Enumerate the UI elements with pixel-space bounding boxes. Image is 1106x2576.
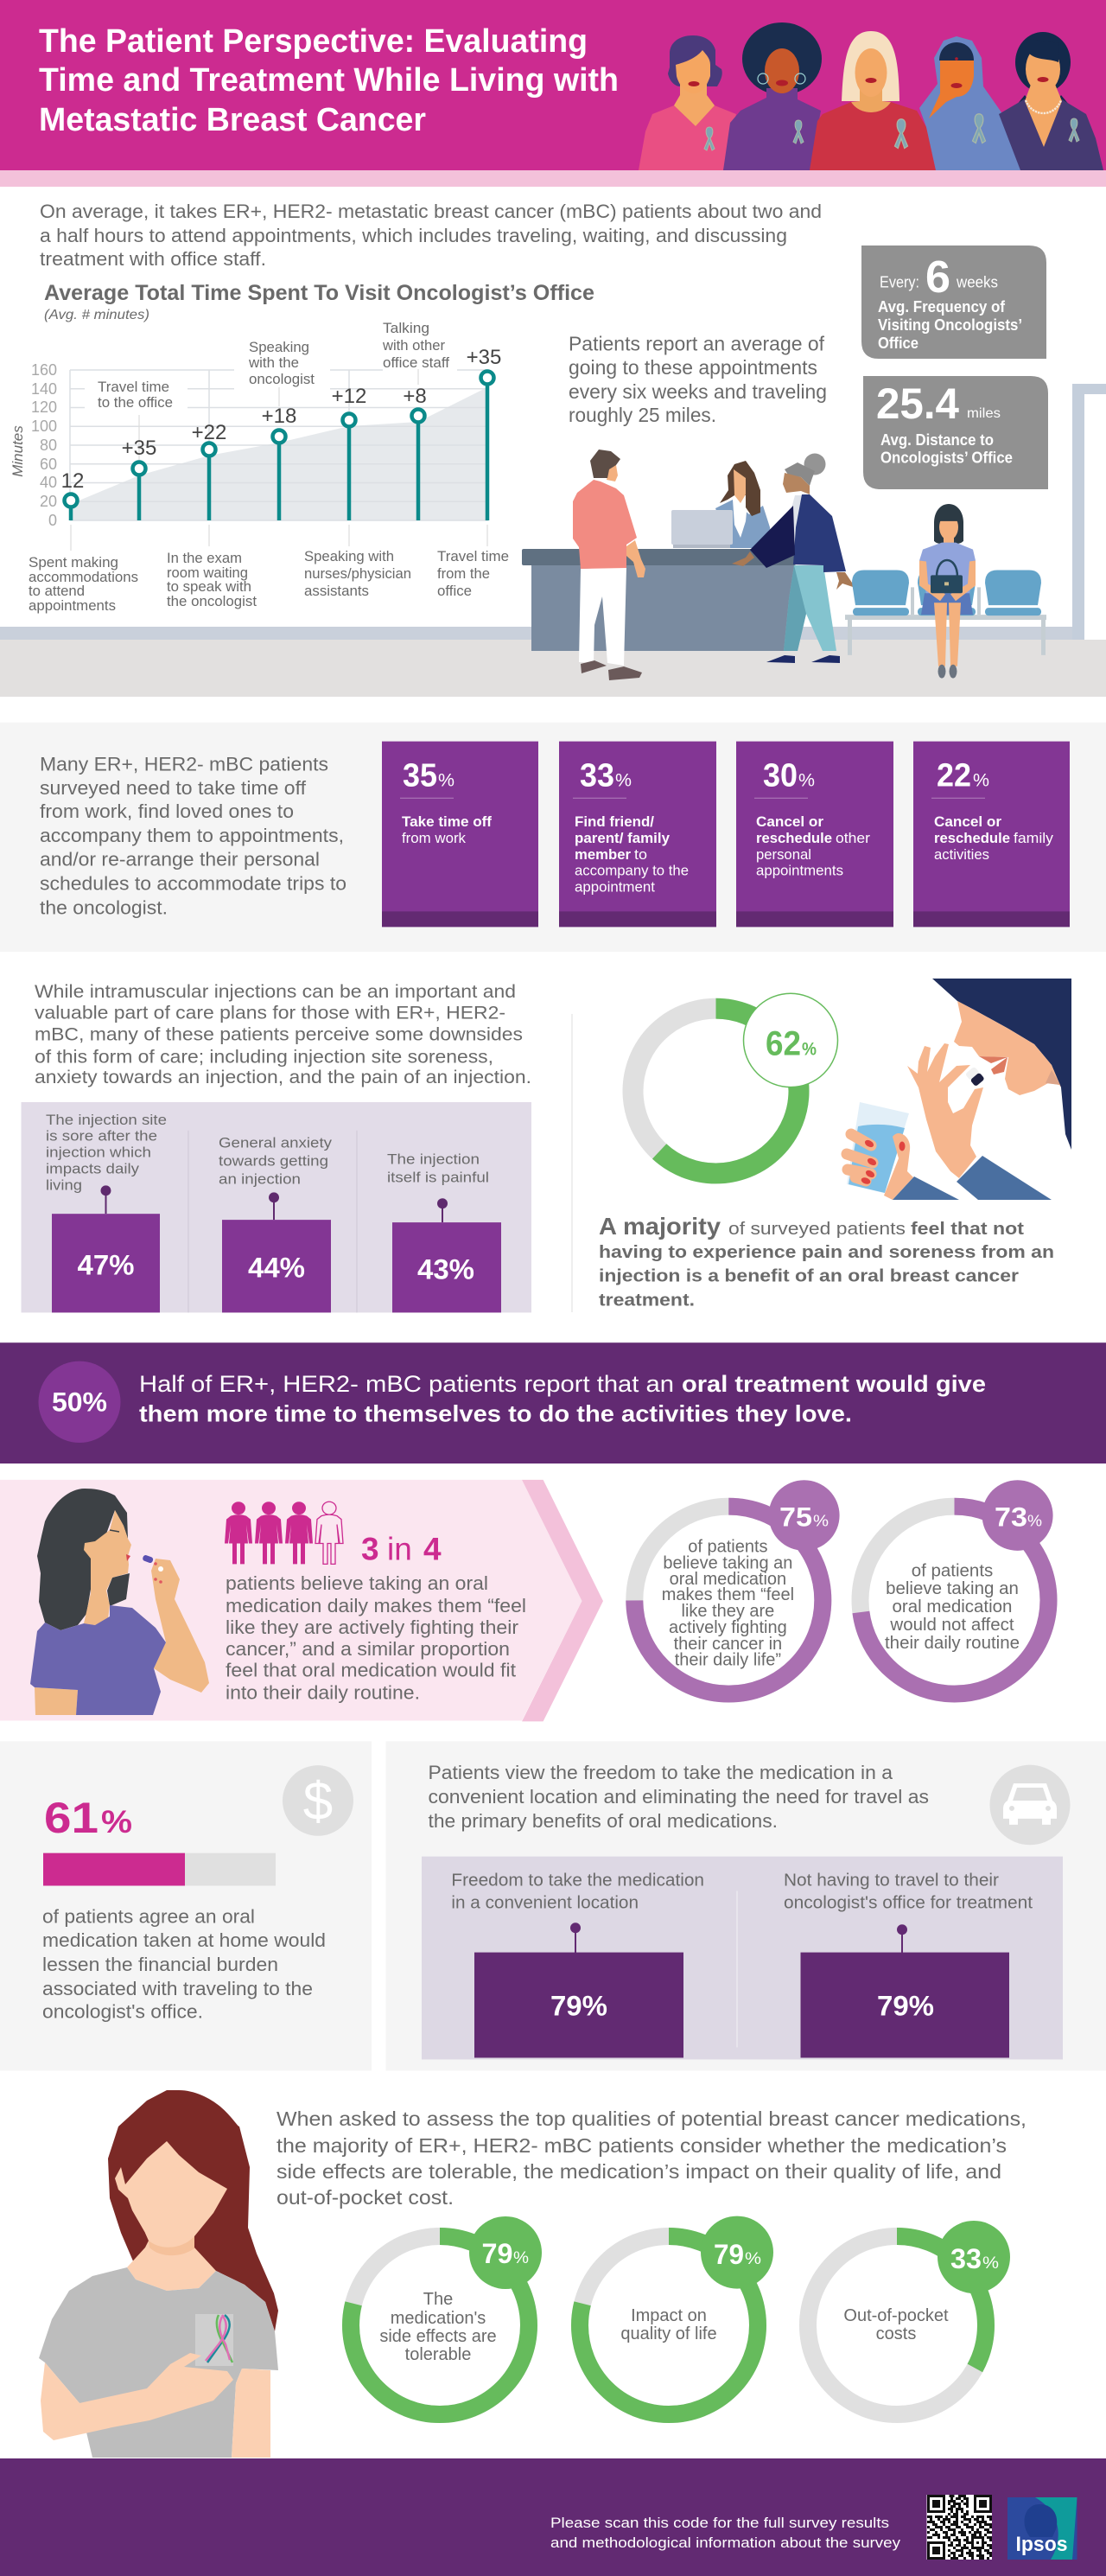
stat card: distance [863,376,1048,489]
text: top qualities: When asked to assess the top qualities of potential breast cancer medications, [276,2107,1027,2130]
title [39,23,619,138]
value labels: +8 [403,385,427,408]
bar: 47%: 47% [77,1249,135,1281]
panel: schedule impact [0,723,1106,952]
text: injections: valuable part of care plans for those with ER+, HER2- [35,1003,505,1023]
donut: side effects 79%: 79 [482,2238,513,2269]
chart heading: (Avg. # minutes) [44,308,149,322]
card: 22%: Cancel or [934,813,1001,830]
stat card: distance: Avg. Distance to [880,431,994,449]
axis labels: 140 [31,380,57,398]
text block: and/or re-arrange their personal [40,849,320,870]
illustration: five women [639,22,1103,170]
bar [43,1853,276,1885]
donut: 75%: believe taking an [663,1553,792,1572]
panel: financial burden [0,1741,372,2070]
card: 30%: personal [756,846,811,863]
stat: 61%: % [101,1804,132,1840]
stat card: frequency: Office [878,335,918,352]
bar: no travel 79%: 79% [877,1990,934,2022]
bar: 47%: is sore after the [46,1128,157,1145]
text: majority: A majority [599,1213,721,1240]
bar: 47% [46,1112,167,1312]
card: 30%: other [836,830,870,846]
step labels above: with the [248,354,299,371]
intro text [40,201,822,270]
value labels [61,346,501,493]
text: injections: anxiety towards an injection, and the pain of an injection. [35,1067,531,1087]
donut: quality of life 79%: % [745,2250,761,2268]
card: 33%: parent/ family [575,830,671,846]
card: 30%: appointments [756,863,843,879]
value labels: +12 [332,385,366,408]
bar: freedom 79% [451,1871,704,2057]
donut: out-of-pocket 33%: % [982,2254,999,2273]
text block: oncologist's office. [42,2001,203,2023]
step labels below: nurses/physician [304,565,411,582]
card: 35%: from work [402,830,467,846]
intro text: On average, it takes ER+, HER2- metastatic breast cancer (mBC) patients about two and [40,201,822,222]
stat: 3 in 4: in [387,1531,412,1566]
text: majority [599,1213,1054,1310]
bar: 44%: an injection [219,1170,301,1187]
step labels below: In the exam [167,550,242,566]
donut: 75%: oral medication [670,1570,786,1589]
text: majority: treatment. [599,1291,695,1310]
card: 30%: % [798,770,815,790]
step labels above: Travel time [98,379,169,395]
receptionist [715,461,771,548]
step labels below [29,548,509,614]
donut: 73%: believe taking an [886,1578,1019,1598]
bar: 43%: The injection [387,1151,480,1168]
card: 35%: Take time off [402,813,492,830]
banner: 50% more time: them more time to themselves to do the activities they love. [139,1401,852,1427]
step labels below: assistants [304,583,369,599]
value labels: +22 [192,421,226,444]
illustration: reception desk [522,450,1046,680]
chart heading [44,281,594,322]
donut: side effects 79%: tolerable [405,2345,471,2364]
stat card: distance: miles [967,406,1001,421]
text: appointment frequency: Patients report an average of [569,332,825,354]
text block: into their daily routine. [226,1682,420,1704]
text block: the primary benefits of oral medications. [428,1810,778,1832]
text block: associated with traveling to the [42,1978,313,1999]
text block: schedules to accommodate trips to [40,873,346,895]
step labels above [98,320,449,411]
lollipop markers [64,372,494,520]
waiting chairs [845,570,1046,655]
text: injections: of this form of care; including injection site soreness, [35,1046,493,1067]
step labels below: appointments [29,597,116,614]
card: 33%: to [634,846,647,863]
step labels below: the oncologist [167,593,257,609]
step labels above: Talking [383,320,429,336]
stat card: frequency [861,245,1046,359]
donut: 73%: their daily routine [885,1633,1020,1653]
step labels above: oncologist [249,371,315,387]
step labels below: from the [437,565,490,582]
text: majority: feel that not [911,1220,1024,1239]
donut: side effects 79% [351,2216,542,2414]
bar: freedom 79%: 79% [550,1990,607,2022]
panel: convenience [385,1741,1106,2070]
bar: no travel 79%: Not having to travel to their [784,1871,999,1890]
donut: quality of life 79% [580,2216,773,2414]
card: 33% [559,742,716,927]
donut: 75%: % [813,1513,829,1531]
donut: 73%: % [1027,1513,1042,1531]
banner: 50% more time [0,1342,1106,1463]
panel: 3 in 4 arrow [0,1480,603,1721]
donut: out-of-pocket 33%: Out-of-pocket [843,2306,949,2325]
donut: 75%: their daily life” [675,1651,781,1670]
axis labels: 80 [40,437,57,454]
donut: 75%: their cancer in [674,1635,782,1654]
donut: side effects 79%: % [513,2249,529,2267]
step labels below: accommodations [29,569,138,585]
text: majority: injection is a benefit of an oral breast cancer [599,1267,1019,1286]
donut: 62%: % [802,1039,817,1059]
stat card: frequency: Every: [880,273,919,290]
text block: convenient location and eliminating the need for travel as [428,1786,929,1808]
text: top qualities: out-of-pocket cost. [276,2186,454,2209]
bar: 47%: living [46,1176,82,1193]
step labels above: with other [382,337,445,354]
stat card: distance: Oncologists’ Office [880,450,1013,467]
card: 33%: Find friend/ [575,813,654,830]
text block: like they are actively fighting their [226,1616,518,1638]
bar: freedom 79%: Freedom to take the medication [451,1871,704,1890]
bar: 47%: The injection site [46,1112,167,1128]
title: Time and Treatment While Living with [39,62,619,99]
illustration: woman with ribbon [39,2090,278,2458]
text: appointment frequency: going to these appointments [569,356,817,379]
text: injections: While intramuscular injections can be an important and [35,981,516,1002]
stat card: frequency: 6 [925,252,950,303]
text block: medication taken at home would [42,1929,326,1951]
banner: 50% more time: oral treatment would give [682,1371,986,1397]
donut: 75% [634,1480,840,1694]
axis labels: 100 [31,418,57,435]
footer text: and methodological information about the survey [550,2535,901,2551]
axis labels [31,361,57,529]
seated woman [919,504,976,679]
donut: 75%: makes them “feel [662,1585,794,1604]
donut: 62%: 62 [766,1024,801,1062]
icon: car [990,1765,1070,1845]
intro text: a half hours to attend appointments, which includes traveling, waiting, and discussing [40,225,787,246]
step labels below: room waiting [167,564,248,581]
floor and wall of waiting room [0,384,1106,697]
footer [0,2458,1106,2576]
text block: feel that oral medication would fit [226,1660,516,1681]
stat: 3 in 4 [361,1531,442,1566]
text block: from work, find loved ones to [40,800,294,822]
step labels above: office staff [383,354,449,371]
card: 22%: activities [934,846,989,863]
axis labels: 40 [40,474,57,491]
axis labels: 60 [40,456,57,473]
laptop [671,510,733,548]
title: The Patient Perspective: Evaluating [39,23,588,60]
stat: 61% [44,1794,132,1842]
step labels below: to speak with [167,578,251,595]
text: top qualities: side effects are tolerable, the medication’s impact on their quality of life, and [276,2160,1001,2183]
bar: freedom 79%: in a convenient location [451,1893,639,1912]
text block [40,753,346,918]
area chart: total time [10,320,509,614]
card: 33%: member [575,846,631,863]
bar: 43% [387,1151,501,1312]
value labels: +35 [122,437,156,460]
axis labels: 160 [31,361,57,379]
text: appointment frequency: roughly 25 miles. [569,404,716,426]
bar: 43%: 43% [417,1253,474,1285]
donut: 75%: of patients [688,1537,768,1556]
stat card: distance: 25.4 [876,379,959,428]
card: 33%: % [615,770,632,790]
card: 33%: appointment [575,879,655,896]
text: appointment frequency: every six weeks and traveling [569,380,827,403]
card: 35%: % [438,770,454,790]
donut: quality of life 79%: quality of life [620,2324,717,2343]
step labels below: to attend [29,583,85,599]
donut: out-of-pocket 33%: 33 [950,2243,982,2274]
intro text: treatment with office staff. [40,248,266,270]
text block: cancer,” and a similar proportion [226,1638,510,1660]
text block: medication daily makes them “feel [226,1595,526,1616]
card: 22%: % [973,770,989,790]
donut: side effects 79%: The [423,2290,453,2309]
step labels below: Speaking with [304,548,394,564]
value labels: 12 [61,469,84,493]
donut: quality of life 79%: Impact on [631,2306,707,2325]
card: 30% [736,742,893,927]
donut: 75%: like they are [682,1602,774,1621]
donut: 73% [861,1480,1053,1694]
text block [226,1572,526,1704]
donut: side effects 79%: side effects are [379,2327,497,2346]
card: 33%: accompany to the [575,863,689,879]
older woman [732,453,855,663]
donut: 73%: would not affect [889,1615,1014,1635]
axis title: Minutes [10,425,26,477]
text: top qualities: the majority of ER+, HER2- mBC patients consider whether the medication’s [276,2134,1007,2157]
stat card: frequency: Visiting Oncologists’ [878,316,1022,334]
donut: quality of life 79%: 79 [714,2239,744,2270]
text block: Many ER+, HER2- mBC patients [40,753,328,775]
bar: 44%: 44% [248,1252,305,1284]
bar: no travel 79% [784,1871,1033,2057]
desk [522,549,796,651]
step labels below: Spent making [29,554,118,571]
axis labels: 20 [40,493,57,510]
stat card: frequency: Avg. Frequency of [878,298,1006,316]
donut: 73%: of patients [912,1560,993,1580]
step labels below: office [437,583,472,599]
text block: patients believe taking an oral [226,1572,488,1594]
text block: accompany them to appointments, [40,825,344,846]
text block [428,1762,929,1832]
icon: dollar [283,1765,353,1836]
bar: no travel 79%: oncologist's office for treatment [784,1893,1033,1912]
title: Metastatic Breast Cancer [39,102,426,138]
illustration: woman taking pill [847,979,1071,1200]
bar: 44% [219,1135,333,1312]
card: 30%: Cancel or [756,813,823,830]
card: 22% [913,742,1070,927]
card: 30%: reschedule [756,830,832,846]
text block: the oncologist. [40,896,168,918]
axis labels: 120 [31,399,57,416]
card: 35% [382,742,538,927]
icon: dollar: $ [303,1772,333,1832]
Ipsos logo [1007,2497,1077,2560]
text block: Patients view the freedom to take the medication in a [428,1762,893,1783]
donut: 75%: 75 [779,1502,812,1533]
text: majority: having to experience pain and soreness from an [599,1243,1054,1262]
bar: 43%: itself is painful [387,1169,489,1185]
card: 22%: reschedule [934,830,1010,846]
banner: 50% more time: 50% [52,1387,107,1418]
donut: side effects 79%: medication's [391,2309,486,2328]
card: 35%: 35 [403,757,437,794]
donut: out-of-pocket 33%: costs [876,2324,916,2343]
step labels above: to the office [98,394,173,411]
bar: 47%: impacts daily [46,1161,140,1176]
ribbon badge [195,2314,233,2366]
donut: 73%: 73 [995,1502,1027,1533]
text: top qualities [276,2107,1027,2209]
panel: injection downsides chart [21,1102,531,1312]
card: 22%: 22 [937,757,971,794]
icon: four people [225,1502,343,1564]
Ipsos logo: Ipsos [1016,2533,1068,2556]
step labels below: Travel time [437,548,509,564]
value labels: +18 [262,405,296,428]
donut: 62% [632,993,838,1173]
bar: 44%: General anxiety [219,1135,333,1151]
footer text [550,2515,901,2551]
chart heading: Average Total Time Spent To Visit Oncologist’s Office [44,281,594,305]
step labels above: Speaking [249,339,309,355]
text block: surveyed need to take time off [40,777,307,799]
card: 33%: 33 [580,757,614,794]
bar: 47%: injection which [46,1145,151,1161]
chart panel [422,1857,1063,2059]
donut: 73%: oral medication [893,1597,1012,1616]
text block: of patients agree an oral [42,1905,255,1927]
text block [42,1905,326,2023]
stat: 3 in 4: 4 [423,1531,442,1566]
card: 22%: family [1014,830,1054,846]
banner: 50% more time: Half of ER+, HER2- mBC patients report that an [139,1371,674,1397]
text block: lessen the financial burden [42,1954,278,1975]
QR code [926,2495,992,2560]
stat card: frequency: weeks [956,273,998,290]
man at desk [573,450,645,680]
axis labels: 0 [48,512,57,529]
text: appointment frequency [569,332,827,426]
illustration: woman with pill [30,1489,209,1715]
bar: 44%: towards getting [219,1153,328,1170]
footer text: Please scan this code for the full survey results [550,2515,889,2531]
stat: 61%: 61 [44,1794,99,1842]
text: injections [35,981,531,1087]
header banner [0,0,1106,187]
donut: 75%: actively fighting [669,1618,787,1637]
text: injections: mBC, many of these patients perceive some downsides [35,1024,523,1044]
value labels: +35 [467,346,501,369]
text: majority: of surveyed patients [728,1220,906,1239]
card: 30%: 30 [763,757,798,794]
stat: 3 in 4: 3 [361,1531,379,1566]
donut: out-of-pocket 33% [808,2221,1010,2414]
